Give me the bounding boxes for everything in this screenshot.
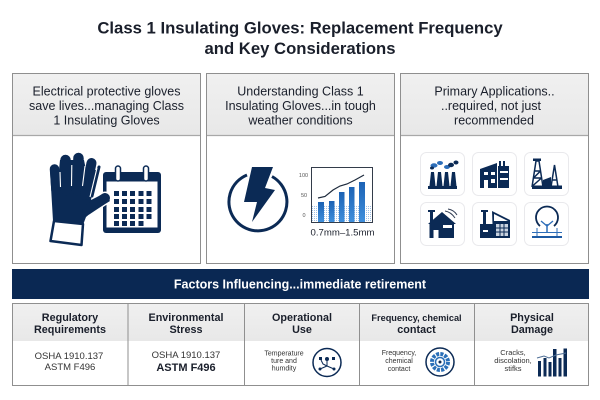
icon: substation dome	[524, 202, 568, 246]
factor: operational use: Temperature	[264, 350, 304, 358]
factor: physical damage: Physical	[510, 312, 554, 324]
factor: operational use	[264, 312, 341, 376]
title: and Key Considerations	[204, 39, 396, 58]
panel heading: save lives...managing Class	[29, 99, 184, 113]
bar chart: 0	[302, 213, 306, 219]
icon: lightning bolt	[229, 167, 287, 231]
icon: industrial plant	[472, 202, 516, 246]
factor: physical damage: stifks	[504, 364, 522, 373]
icon: calendar	[103, 166, 161, 233]
factor: regulatory requirements: Regulatory	[42, 312, 98, 324]
panel heading: Electrical protective gloves	[33, 84, 180, 98]
banner	[12, 269, 589, 299]
factor: operational use: humdity	[272, 366, 297, 372]
panel heading: 1 Insulating Gloves	[53, 114, 160, 128]
factor: environmental stress: Environmental	[148, 312, 224, 324]
factor: operational use: Use	[292, 324, 312, 336]
bar chart	[299, 168, 374, 238]
factor: environmental stress	[148, 312, 224, 374]
panel heading: Understanding Class 1	[237, 84, 364, 98]
panel: primary applications	[400, 74, 588, 264]
factor: operational use: Operational	[272, 312, 332, 324]
panel heading	[434, 84, 555, 128]
factor: frequency, chemical contact: chemical	[385, 358, 413, 365]
factor: frequency, chemical contact: contact	[397, 324, 436, 336]
bar chart: 100	[299, 173, 308, 179]
factor: regulatory requirements: Requirements	[34, 324, 106, 336]
panel heading: weather conditions	[247, 114, 353, 128]
panel heading	[225, 84, 376, 128]
panel heading: Insulating Gloves...in tough	[225, 99, 376, 113]
panel heading	[29, 84, 184, 128]
icon: glove	[50, 158, 110, 245]
panel heading: recommended	[454, 114, 534, 128]
icon: oil derricks	[524, 152, 568, 196]
bar chart: 0.7mm–1.5mm	[311, 228, 374, 238]
panel heading: ..required, not just	[441, 99, 542, 113]
factor: physical damage	[494, 312, 567, 376]
factor: physical damage: Cracks,	[500, 348, 526, 357]
factor: regulatory requirements: OSHA 1910.137	[35, 351, 103, 362]
icon: network circle	[313, 348, 341, 376]
factor: regulatory requirements: ASTM F496	[45, 362, 95, 373]
factor: environmental stress: ASTM F496	[156, 362, 216, 374]
bar chart: 50	[301, 193, 307, 199]
factor: environmental stress: OSHA 1910.137	[152, 350, 220, 361]
icon: power plant stacks	[420, 152, 464, 196]
panel: electrical protective gloves	[12, 74, 200, 264]
factor: physical damage: discolation,	[494, 356, 532, 365]
factor: environmental stress: Stress	[169, 324, 203, 336]
title	[97, 18, 503, 58]
icon: damage bars	[537, 348, 567, 376]
factor: frequency, chemical contact: Frequency, chemical	[371, 313, 462, 323]
factor: frequency, chemical contact	[371, 313, 462, 376]
panel heading: Primary Applications..	[434, 84, 555, 98]
icon: factory	[472, 152, 516, 196]
factor: physical damage: Damage	[511, 324, 553, 336]
icon: gear circle	[426, 348, 454, 376]
factor: regulatory requirements	[34, 312, 106, 373]
panel: understanding class 1 gloves	[206, 74, 394, 264]
icon: house	[420, 202, 464, 246]
factor: operational use: ture and	[271, 358, 297, 365]
title: Class 1 Insulating Gloves: Replacement Frequency	[97, 18, 503, 38]
panel: factors table	[12, 304, 588, 386]
factor: frequency, chemical contact: Frequency,	[382, 350, 416, 357]
banner: Factors Influencing...immediate retirement	[174, 278, 427, 292]
factor: frequency, chemical contact: contact	[388, 366, 410, 373]
